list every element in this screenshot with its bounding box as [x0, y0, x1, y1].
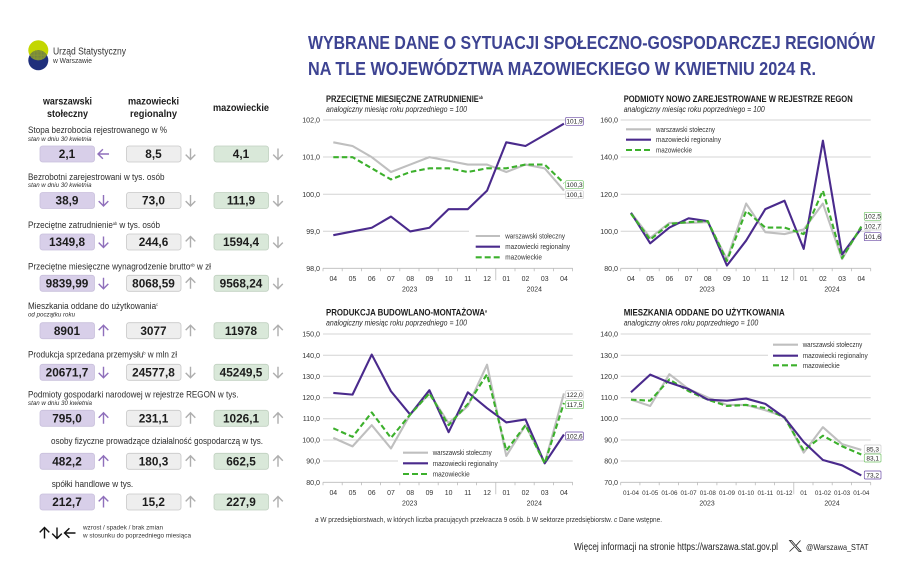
row: osoby fizyczne: osoby fizyczne prowadzące działalność gospodarczą w tys. — [51, 436, 263, 447]
column headers: warszawski — [42, 97, 92, 108]
row: podmioty gospodarki narodowej: 1026,1 — [223, 412, 259, 426]
chart: przeciętne miesięczne zatrudnienie: 02 — [522, 276, 529, 283]
chart: mieszkania oddane do użytkowania: 120,0 — [600, 373, 618, 381]
chart: mieszkania oddane do użytkowania: 01-08 — [700, 490, 716, 497]
chart: podmioty nowo zarejestrowane: 11 — [762, 276, 769, 283]
chart: produkcja budowlano-montażowa: 01 — [502, 490, 510, 497]
chart: przeciętne miesięczne zatrudnienie: 05 — [349, 276, 356, 283]
chart: przeciętne miesięczne zatrudnienie: 04 — [560, 276, 568, 283]
chart: podmioty nowo zarejestrowane: 100,0 — [600, 228, 618, 236]
chart: produkcja budowlano-montażowa: 140,0 — [302, 352, 320, 360]
chart: produkcja budowlano-montażowa: 03 — [541, 490, 549, 497]
row: produkcja sprzedana: w mln zł — [145, 350, 178, 361]
row: wynagrodzenie: 8068,59 — [132, 276, 175, 290]
chart: podmioty nowo zarejestrowane: warszawski stołeczny — [655, 125, 715, 134]
row: wynagrodzenie — [28, 261, 283, 291]
chart: produkcja budowlano-montażowa — [302, 306, 583, 508]
chart: podmioty nowo zarejestrowane: 09 — [723, 276, 731, 283]
chart: produkcja budowlano-montażowa: 120,0 — [302, 394, 320, 402]
chart: podmioty nowo zarejestrowane: 08 — [704, 276, 712, 283]
chart: mieszkania oddane do użytkowania: 85,3 — [866, 446, 879, 453]
row: stopa bezrobocia: stan w dniu 30 kwietnia — [28, 136, 92, 143]
row: produkcja sprzedana: 24577,8 — [132, 366, 175, 380]
row: spółki handlowe: 227,9 — [226, 495, 256, 509]
chart: przeciętne miesięczne zatrudnienie: 99,0 — [306, 228, 320, 236]
chart: podmioty nowo zarejestrowane: 10 — [742, 276, 750, 283]
chart: mieszkania oddane do użytkowania: mazowieckie — [803, 361, 840, 370]
chart: mieszkania oddane do użytkowania — [600, 306, 881, 508]
chart: mieszkania oddane do użytkowania: MIESZKANIA ODDANE DO UŻYTKOWANIA — [624, 306, 785, 317]
chart: mieszkania oddane do użytkowania: analogiczny okres roku poprzedniego = 100 — [624, 318, 759, 327]
row: mieszkania oddane: od początku roku — [28, 312, 75, 318]
row: mieszkania oddane: Mieszkania oddane do użytkowania — [28, 301, 179, 312]
chart: przeciętne miesięczne zatrudnienie: 2024 — [527, 287, 542, 294]
row: mieszkania oddane — [28, 301, 283, 339]
row: bezrobotni zarejestrowani: stan w dniu 30 kwietnia — [28, 182, 92, 189]
row: mieszkania oddane: 3077 — [140, 324, 167, 338]
row: przeciętne zatrudnienie: 244,6 — [139, 235, 169, 249]
chart: przeciętne miesięczne zatrudnienie — [302, 93, 583, 294]
chart: produkcja budowlano-montażowa: 2024 — [527, 501, 542, 508]
row: produkcja sprzedana: 45249,5 — [220, 366, 263, 380]
chart: podmioty nowo zarejestrowane: 12 — [781, 276, 788, 283]
row: podmioty gospodarki narodowej: 231,1 — [139, 412, 169, 426]
chart: mieszkania oddane do użytkowania: 83,1 — [866, 455, 879, 462]
chart: mieszkania oddane do użytkowania: 110,0 — [601, 394, 618, 402]
chart: przeciętne miesięczne zatrudnienie: 101,0 — [302, 154, 320, 162]
chart: przeciętne miesięczne zatrudnienie: 01 — [502, 276, 510, 283]
row: mieszkania oddane: 11978 — [225, 324, 258, 338]
chart: przeciętne miesięczne zatrudnienie: PRZECIĘTNE MIESIĘCZNE ZATRUDNIENIE — [326, 93, 517, 104]
chart: produkcja budowlano-montażowa: mazowiecki regionalny — [433, 459, 498, 468]
chart: produkcja budowlano-montażowa: 102,6 — [566, 433, 583, 440]
chart: podmioty nowo zarejestrowane: 140,0 — [600, 154, 618, 162]
chart: podmioty nowo zarejestrowane: 01 — [800, 276, 808, 283]
chart: produkcja budowlano-montażowa: 02 — [522, 490, 529, 497]
chart: mieszkania oddane do użytkowania: 01-10 — [738, 490, 755, 497]
row: bezrobotni zarejestrowani: 38,9 — [56, 194, 79, 208]
chart: produkcja budowlano-montażowa: 80,0 — [306, 479, 320, 487]
chart: podmioty nowo zarejestrowane: 07 — [685, 276, 693, 283]
chart: podmioty nowo zarejestrowane: 102,7 — [865, 223, 881, 230]
chart: przeciętne miesięczne zatrudnienie: 03 — [541, 276, 549, 283]
row: przeciętne zatrudnienie: 1594,4 — [223, 235, 259, 249]
chart: przeciętne miesięczne zatrudnienie: mazowiecki regionalny — [505, 242, 570, 251]
chart: przeciętne miesięczne zatrudnienie: 98,0 — [306, 265, 320, 273]
row: podmioty gospodarki narodowej: Podmioty gospodarki narodowej w rejestrze REGON w tys. — [28, 389, 238, 400]
row: bezrobotni zarejestrowani: Bezrobotni zarejestrowani w tys. osób — [28, 172, 164, 183]
chart: podmioty nowo zarejestrowane: 04 — [857, 276, 865, 283]
chart: przeciętne miesięczne zatrudnienie: 08 — [406, 276, 414, 283]
chart: produkcja budowlano-montażowa: mazowieckie — [433, 470, 470, 478]
chart: przeciętne miesięczne zatrudnienie: analogiczny miesiąc roku poprzedniego = 100 — [326, 105, 468, 114]
chart: mieszkania oddane do użytkowania: 01-05 — [642, 490, 659, 497]
chart: mieszkania oddane do użytkowania: 140,0 — [600, 330, 618, 338]
logo: Urząd Statystyczny w Warszawie: Urząd Statystyczny — [53, 46, 126, 58]
chart: podmioty nowo zarejestrowane: 80,0 — [604, 265, 618, 273]
chart: mieszkania oddane do użytkowania: 2023 — [699, 501, 715, 508]
row: stopa bezrobocia: 8,5 — [145, 147, 162, 161]
column headers: regionalny — [130, 109, 177, 120]
row: mieszkania oddane: 8901 — [54, 324, 81, 338]
chart: przeciętne miesięczne zatrudnienie: 100,1 — [566, 192, 583, 199]
chart: produkcja budowlano-montażowa: 90,0 — [306, 458, 320, 466]
chart: produkcja budowlano-montażowa: 06 — [368, 490, 376, 497]
row: przeciętne zatrudnienie: w tys. osób — [117, 220, 160, 231]
chart: produkcja budowlano-montażowa: PRODUKCJA BUDOWLANO-MONTAŻOWA — [326, 306, 516, 317]
chart: mieszkania oddane do użytkowania: 70,0 — [604, 479, 618, 487]
chart: przeciętne miesięczne zatrudnienie: 11 — [464, 276, 472, 283]
row: spółki handlowe: 15,2 — [142, 495, 165, 509]
chart: mieszkania oddane do użytkowania: 01-02 — [815, 490, 831, 497]
row: stopa bezrobocia: Stopa bezrobocia rejestrowanego w % — [28, 125, 167, 136]
row: bezrobotni zarejestrowani: 111,9 — [227, 194, 256, 208]
row: wynagrodzenie: 9568,24 — [220, 276, 263, 290]
column headers — [42, 97, 269, 120]
chart: przeciętne miesięczne zatrudnienie: 04 — [329, 276, 337, 283]
chart: mieszkania oddane do użytkowania: 01-04 — [853, 490, 870, 497]
arrows legend: w stosunku do poprzedniego miesiąca — [82, 532, 191, 540]
chart: produkcja budowlano-montażowa: 05 — [349, 490, 356, 497]
row: produkcja sprzedana: 20671,7 — [46, 366, 89, 380]
chart: przeciętne miesięczne zatrudnienie: 09 — [426, 276, 433, 283]
row: spółki handlowe: spółki handlowe w tys. — [52, 479, 133, 490]
footer: more information: Więcej informacji na stronie https://warszawa.stat.gov.pl — [574, 542, 778, 553]
row: produkcja sprzedana: b — [143, 351, 146, 356]
chart: podmioty nowo zarejestrowane — [600, 93, 881, 294]
chart: podmioty nowo zarejestrowane: 2023 — [699, 287, 715, 294]
chart: mieszkania oddane do użytkowania: 90,0 — [604, 436, 618, 444]
chart: mieszkania oddane do użytkowania: 01-12 — [776, 490, 793, 497]
row: podmioty gospodarki narodowej: 795,0 — [52, 412, 82, 426]
chart: produkcja budowlano-montażowa: 110,0 — [303, 415, 320, 423]
chart: podmioty nowo zarejestrowane: 06 — [666, 276, 673, 283]
chart: przeciętne miesięczne zatrudnienie: mazowieckie — [505, 253, 542, 262]
footnotes: a W przedsiębiorstwach, w których liczba pracujących przekracza 9 osób. b W sektorze przedsiębiorstw. c Dane wstępne. — [315, 517, 662, 524]
row: przeciętne zatrudnienie: Przeciętne zatrudnienie — [28, 220, 128, 231]
chart: przeciętne miesięczne zatrudnienie: 100,3 — [566, 182, 583, 189]
chart: podmioty nowo zarejestrowane: PODMIOTY NOWO ZAREJESTROWANE W REJESTRZE REGON — [624, 93, 853, 104]
column headers: mazowieckie — [213, 103, 269, 114]
column headers: stołeczny — [47, 109, 88, 120]
chart: mieszkania oddane do użytkowania: 2024 — [824, 501, 840, 508]
row: osoby fizyczne: 180,3 — [139, 454, 169, 468]
row: przeciętne zatrudnienie — [28, 220, 283, 250]
chart: mieszkania oddane do użytkowania: 01-11 — [757, 490, 774, 497]
chart: produkcja budowlano-montażowa: analogiczny miesiąc roku poprzedniego = 100 — [326, 318, 468, 327]
chart: mieszkania oddane do użytkowania: 01-03 — [834, 490, 851, 497]
chart: produkcja budowlano-montażowa: 12 — [483, 490, 491, 497]
row: stopa bezrobocia — [28, 125, 283, 162]
chart: mieszkania oddane do użytkowania: mazowiecki regionalny — [803, 351, 868, 360]
row: spółki handlowe: 212,7 — [52, 495, 82, 509]
chart: produkcja budowlano-montażowa: warszawski stołeczny — [432, 448, 492, 457]
row: produkcja sprzedana — [28, 350, 283, 380]
row: bezrobotni zarejestrowani: 73,0 — [142, 194, 165, 208]
icon: X logo — [790, 540, 801, 552]
chart: podmioty nowo zarejestrowane: 03 — [838, 276, 846, 283]
title: NA TLE WOJEWÓDZTWA MAZOWIECKIEGO W KWIETNIU 2024 R. — [308, 58, 816, 79]
chart: produkcja budowlano-montażowa: 122,0 — [566, 392, 583, 399]
chart: podmioty nowo zarejestrowane: analogiczny miesiąc roku poprzedniego = 100 — [624, 105, 765, 114]
arrows legend — [40, 525, 191, 540]
logo: Urząd Statystyczny w Warszawie — [28, 40, 126, 70]
row: przeciętne zatrudnienie: 1349,8 — [49, 235, 85, 249]
row: podmioty gospodarki narodowej: stan w dniu 30 kwietnia — [28, 400, 92, 407]
chart: produkcja budowlano-montażowa: 08 — [406, 490, 414, 497]
column headers: mazowiecki — [128, 97, 179, 108]
chart: przeciętne miesięczne zatrudnienie: 102,0 — [302, 116, 320, 124]
logo: Urząd Statystyczny w Warszawie: w Warszawie — [52, 56, 92, 65]
chart: mieszkania oddane do użytkowania: 80,0 — [604, 458, 618, 466]
chart: podmioty nowo zarejestrowane: 101,6 — [865, 234, 881, 241]
chart: produkcja budowlano-montażowa: 2023 — [402, 501, 418, 508]
row: bezrobotni zarejestrowani — [28, 172, 283, 208]
chart: mieszkania oddane do użytkowania: 01-07 — [681, 490, 697, 497]
row: mieszkania oddane: c — [156, 302, 159, 307]
chart: podmioty nowo zarejestrowane: 102,5 — [865, 214, 881, 221]
chart: podmioty nowo zarejestrowane: mazowieckie — [656, 146, 692, 154]
chart: podmioty nowo zarejestrowane: 05 — [646, 276, 654, 283]
chart: podmioty nowo zarejestrowane: mazowiecki regionalny — [656, 135, 721, 144]
chart: produkcja budowlano-montażowa: 04 — [560, 490, 568, 497]
row: wynagrodzenie: w zł — [195, 261, 212, 272]
chart: produkcja budowlano-montażowa: 117,5 — [567, 402, 583, 409]
chart: przeciętne miesięczne zatrudnienie: 06 — [368, 276, 376, 283]
chart: przeciętne miesięczne zatrudnienie: 101,9 — [566, 119, 583, 126]
row: osoby fizyczne — [40, 436, 283, 469]
chart: produkcja budowlano-montażowa: 130,0 — [302, 373, 320, 381]
chart: produkcja budowlano-montażowa: a — [485, 308, 487, 313]
chart: podmioty nowo zarejestrowane: 04 — [627, 276, 635, 283]
chart: produkcja budowlano-montażowa: 09 — [426, 490, 433, 497]
chart: mieszkania oddane do użytkowania: 100,0 — [600, 415, 618, 423]
row: wynagrodzenie: Przeciętne miesięczne wynagrodzenie brutto — [28, 261, 218, 272]
footer: social handle: @Warszawa_STAT — [806, 542, 868, 552]
chart: podmioty nowo zarejestrowane: 02 — [819, 276, 827, 283]
chart: przeciętne miesięczne zatrudnienie: 100,0 — [302, 191, 320, 199]
row: przeciętne zatrudnienie: ab — [113, 221, 118, 226]
chart: produkcja budowlano-montażowa: 10 — [445, 490, 453, 497]
chart: produkcja budowlano-montażowa: 11 — [464, 490, 472, 497]
chart: przeciętne miesięczne zatrudnienie: warszawski stołeczny — [504, 232, 565, 240]
chart: mieszkania oddane do użytkowania: 130,0 — [600, 352, 618, 360]
row: produkcja sprzedana: Produkcja sprzedana przemysłu — [28, 350, 165, 361]
chart: mieszkania oddane do użytkowania: warszawski stołeczny — [802, 340, 863, 349]
chart: produkcja budowlano-montażowa: 04 — [329, 490, 337, 497]
chart: mieszkania oddane do użytkowania: 73,2 — [866, 472, 879, 479]
row: stopa bezrobocia: 4,1 — [233, 147, 250, 161]
row: osoby fizyczne: 482,2 — [52, 454, 82, 468]
chart: produkcja budowlano-montażowa: 07 — [387, 490, 395, 497]
row: osoby fizyczne: 662,5 — [226, 454, 256, 468]
arrows legend: wzrost / spadek / brak zmian — [82, 525, 163, 532]
row: wynagrodzenie: ab — [190, 262, 195, 267]
chart: mieszkania oddane do użytkowania: 01-04 — [623, 490, 640, 497]
chart: produkcja budowlano-montażowa: 150,0 — [302, 330, 320, 338]
chart: przeciętne miesięczne zatrudnienie: 12 — [483, 276, 491, 283]
chart: produkcja budowlano-montażowa: 100,0 — [302, 436, 320, 444]
chart: mieszkania oddane do użytkowania: 01-06 — [661, 490, 678, 497]
chart: mieszkania oddane do użytkowania: 01-09 — [719, 490, 736, 497]
row: spółki handlowe — [40, 479, 283, 510]
chart: mieszkania oddane do użytkowania: 01 — [800, 490, 808, 497]
row: stopa bezrobocia: 2,1 — [59, 147, 76, 161]
chart: przeciętne miesięczne zatrudnienie: 10 — [445, 276, 453, 283]
chart: podmioty nowo zarejestrowane: 120,0 — [600, 191, 618, 199]
row: wynagrodzenie: 9839,99 — [46, 276, 89, 290]
chart: przeciętne miesięczne zatrudnienie: 07 — [387, 276, 395, 283]
row: podmioty gospodarki narodowej — [28, 389, 283, 426]
chart: podmioty nowo zarejestrowane: 160,0 — [600, 116, 618, 124]
title — [308, 32, 875, 79]
chart: podmioty nowo zarejestrowane: 2024 — [824, 287, 840, 294]
chart: przeciętne miesięczne zatrudnienie: ab — [479, 95, 483, 100]
chart: przeciętne miesięczne zatrudnienie: 2023 — [402, 287, 418, 294]
